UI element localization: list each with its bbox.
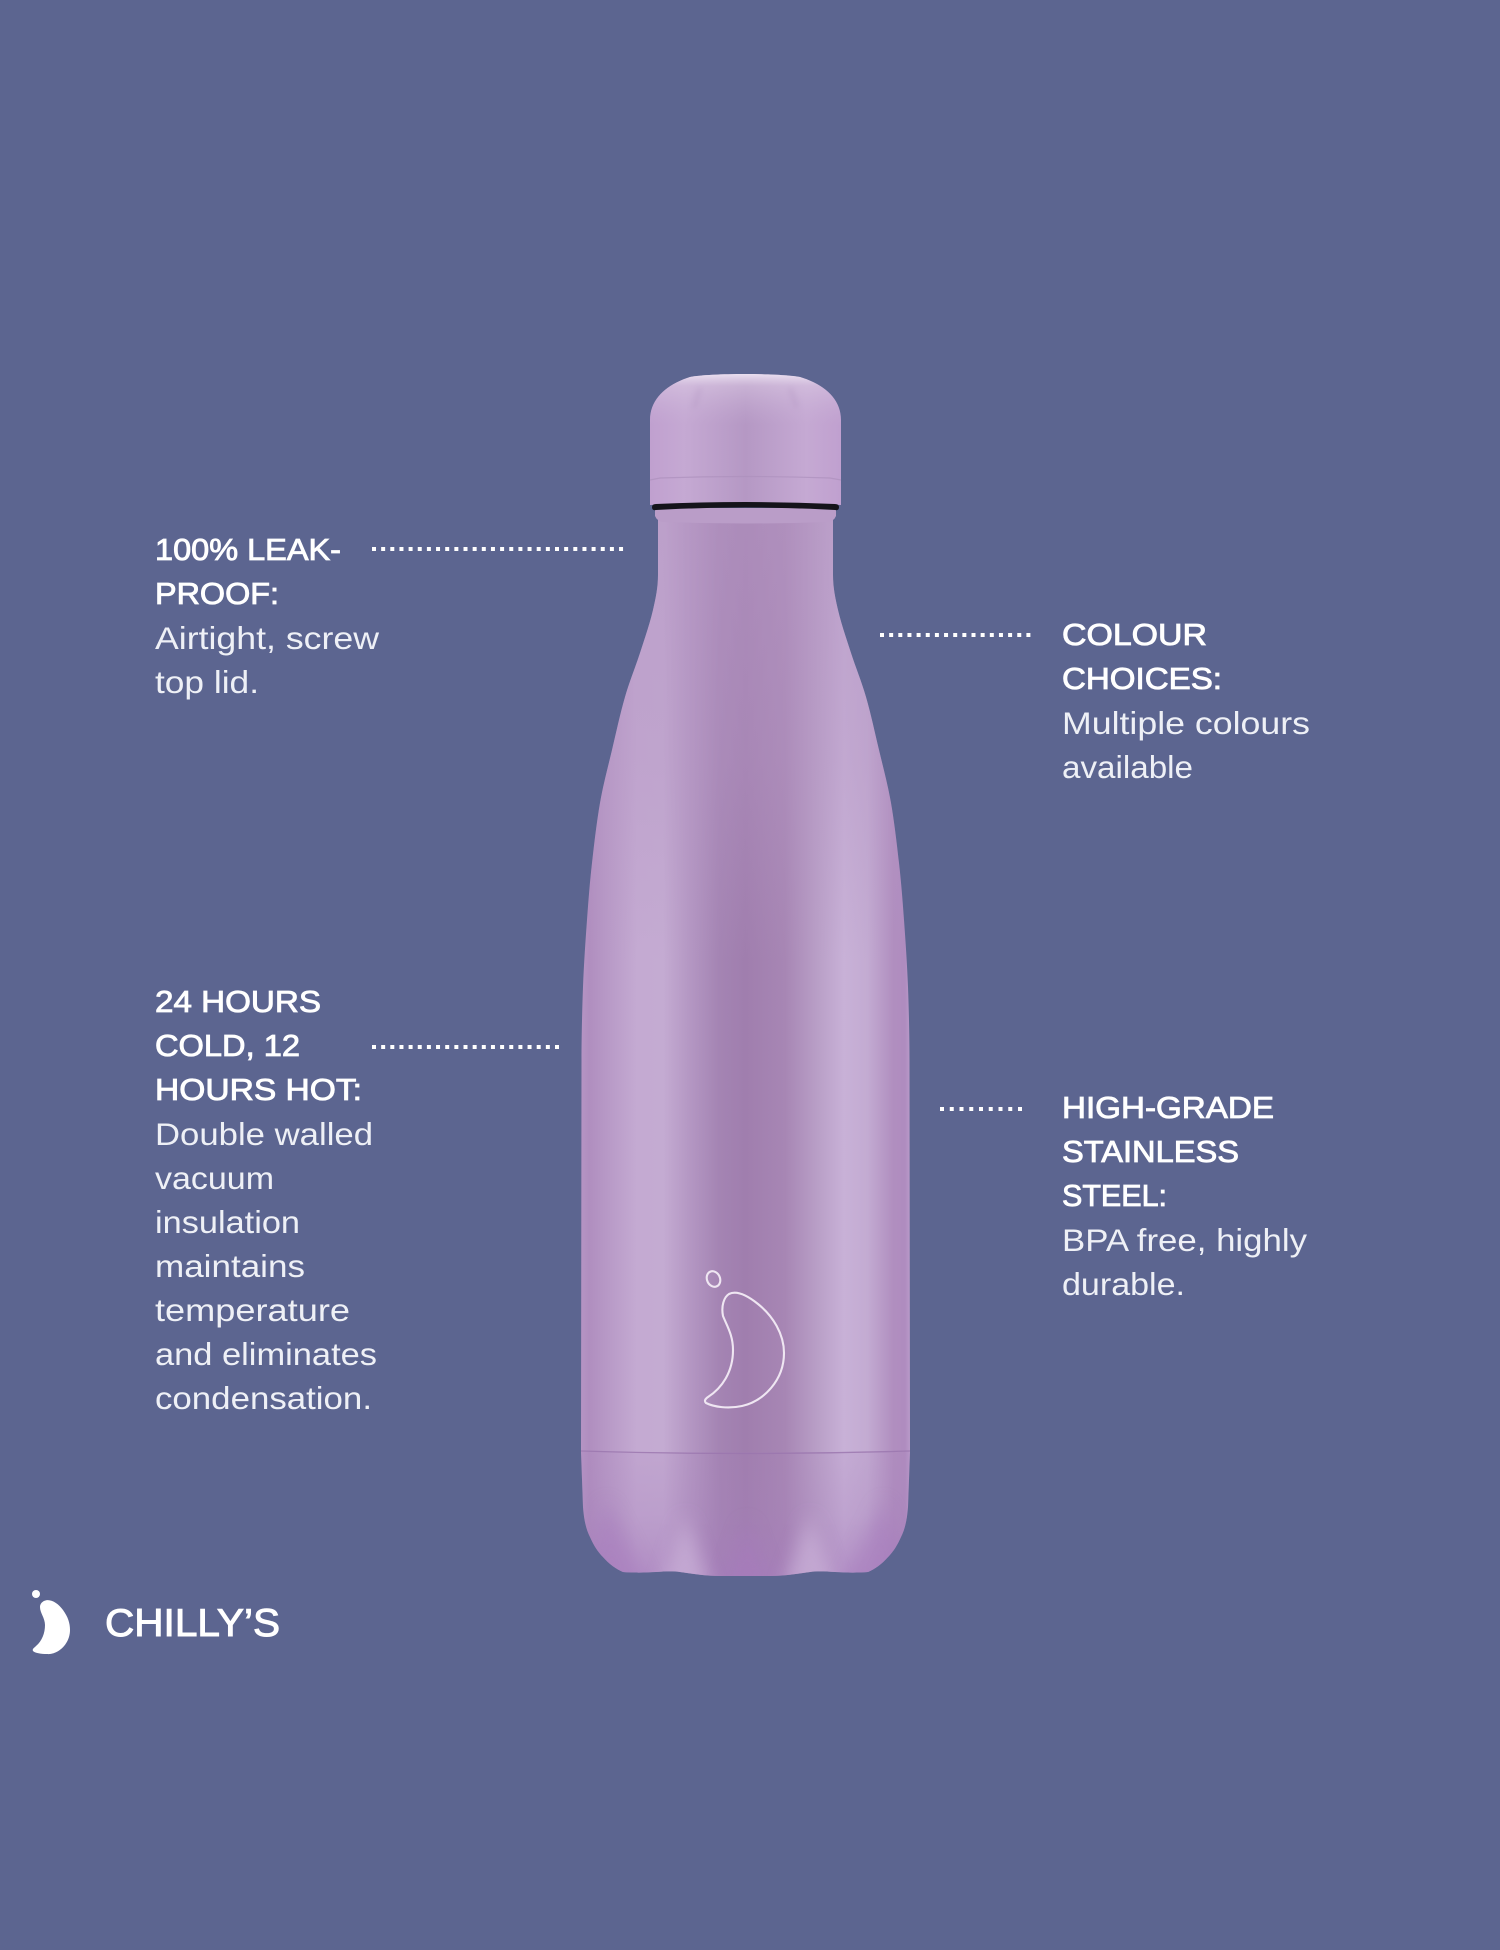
callout: stainless steel [940, 1091, 1307, 1302]
description: Double walled [155, 1116, 373, 1152]
description: BPA free, highly [1062, 1222, 1307, 1258]
heading: COLD, 12 [155, 1029, 300, 1063]
leader line [880, 633, 1032, 637]
heading [155, 533, 341, 611]
callout: temperature [155, 985, 560, 1416]
callout: leak-proof [155, 533, 624, 700]
callout: colour choices [880, 618, 1310, 785]
heading: HIGH-GRADE [1062, 1091, 1274, 1125]
heading: 100% LEAK- [155, 533, 341, 567]
heading: STEEL: [1062, 1179, 1167, 1213]
heading: CHOICES: [1062, 662, 1222, 696]
bottle illustration [581, 374, 910, 1576]
description [1062, 1222, 1307, 1302]
heading: COLOUR [1062, 618, 1207, 652]
description: and eliminates [155, 1336, 377, 1372]
description: top lid. [155, 664, 259, 700]
leader line [372, 1045, 560, 1049]
black ring [652, 502, 839, 510]
heading: 24 HOURS [155, 985, 321, 1019]
heading [155, 985, 362, 1107]
wordmark: CHILLY’S [105, 1602, 280, 1645]
heading: HOURS HOT: [155, 1073, 362, 1107]
description [155, 1116, 377, 1416]
description: maintains [155, 1248, 305, 1284]
description: condensation. [155, 1380, 372, 1416]
heading: STAINLESS [1062, 1135, 1239, 1169]
description [155, 620, 379, 700]
icon: moon [32, 1590, 70, 1654]
lid [650, 374, 841, 505]
leader line [372, 547, 624, 551]
description: Airtight, screw [155, 620, 379, 656]
leader line [940, 1107, 1023, 1111]
bottle body [581, 520, 910, 1576]
heading: PROOF: [155, 577, 279, 611]
description [1062, 705, 1310, 785]
description: durable. [1062, 1266, 1185, 1302]
brand logo [32, 1590, 280, 1654]
description: available [1062, 749, 1193, 785]
heading [1062, 618, 1222, 696]
description: temperature [155, 1292, 350, 1328]
neck collar [655, 508, 836, 524]
base seam [581, 1451, 910, 1454]
bottle logo outline [704, 1269, 784, 1407]
heading [1062, 1091, 1274, 1213]
description: Multiple colours [1062, 705, 1310, 741]
description: insulation [155, 1204, 300, 1240]
description: vacuum [155, 1160, 274, 1196]
